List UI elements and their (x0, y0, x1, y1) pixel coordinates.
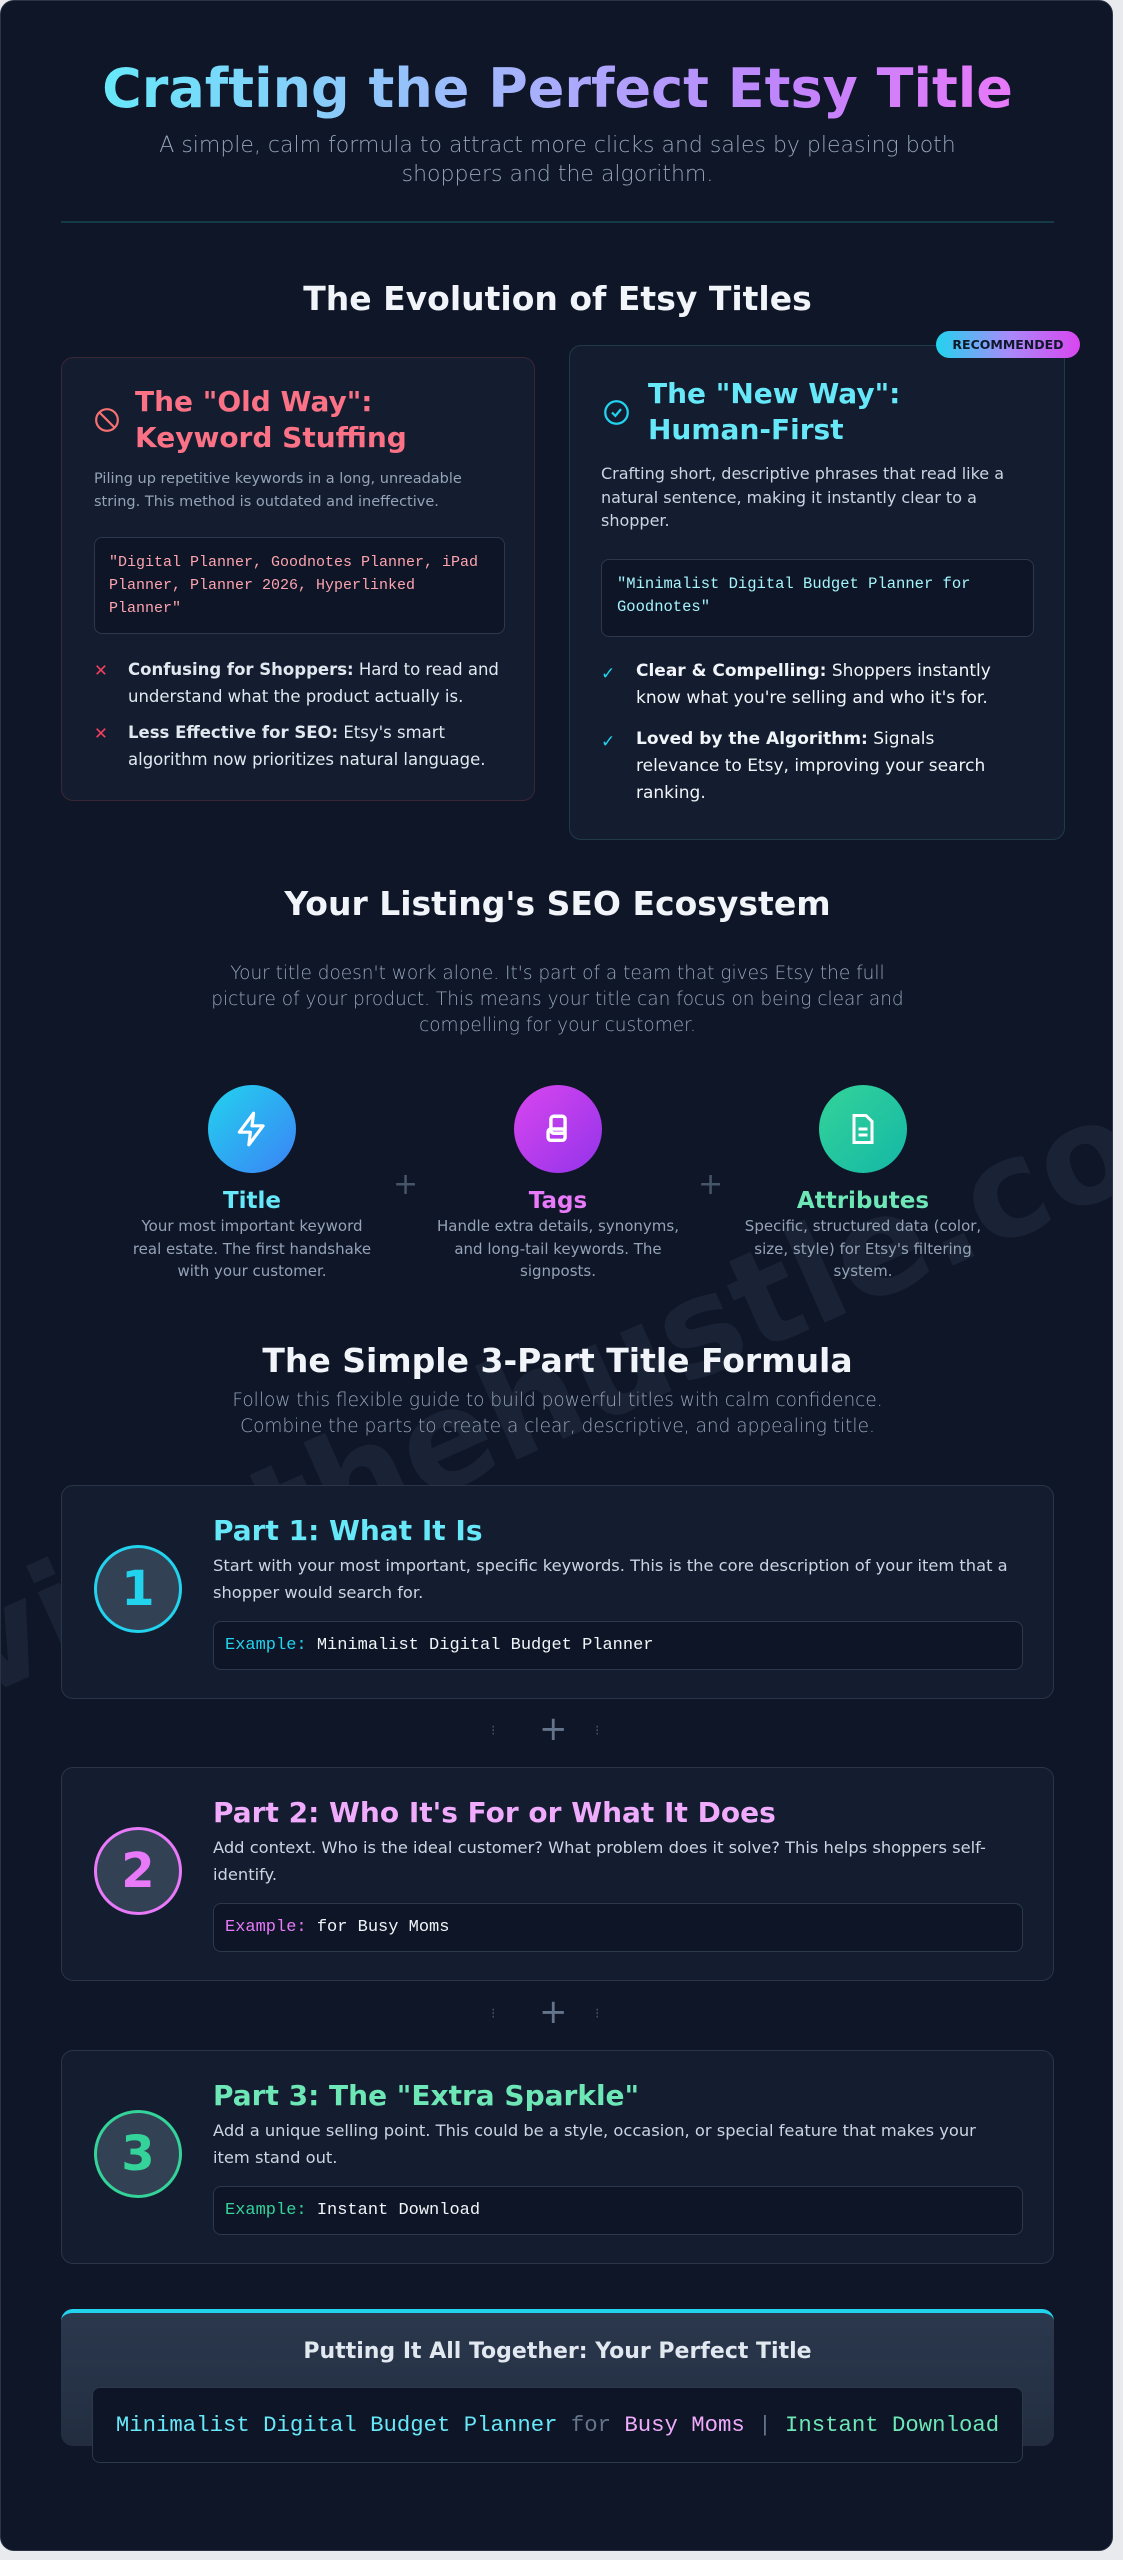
item: tags: Tags (529, 1188, 587, 1214)
icon: document (819, 1085, 907, 1173)
example: part 1: Example: Minimalist Digital Budget Planner (225, 1636, 653, 1655)
heading: formula: The Simple 3-Part Title Formula (262, 1341, 853, 1380)
text: part 3: Add a unique selling point. This could be a style, occasion, or special feature that makes your item stand out. (213, 2121, 976, 2167)
example: part 2 (213, 1903, 1023, 1952)
badge: 2: 2 (121, 1843, 155, 1899)
code: final title (92, 2387, 1023, 2463)
badge: 1: 1 (121, 1561, 155, 1617)
bullets: new pros: Clear & Compelling: Shoppers instantly know what you're selling and who it's for. (636, 661, 991, 708)
text: old description: Piling up repetitive keywords in a long, unreadable string. This method is outdated and ineffective. (94, 471, 462, 510)
bullets: new pros: ✓ (601, 664, 615, 684)
badge: recommended: RECOMMENDED (952, 337, 1064, 352)
heading: final: Putting It All Together: Your Perfect Title (303, 2339, 812, 2364)
example: part 3: Example: Instant Download (225, 2201, 480, 2220)
text: part 2: Add context. Who is the ideal customer? What problem does it solve? This helps shoppers self-identify. (213, 1838, 986, 1884)
code: new example (601, 559, 1034, 637)
item: attributes (745, 1085, 981, 1280)
item: attributes: Specific, structured data (color, size, style) for Etsy's filtering system. (745, 1217, 981, 1280)
badge: 3 (94, 2110, 182, 2198)
heading: evolution: The Evolution of Etsy Titles (303, 279, 812, 318)
badge: recommended (936, 331, 1080, 358)
connector: ⁝ (491, 1723, 495, 1739)
example: part 3 (213, 2186, 1023, 2235)
heading: new way (648, 377, 900, 446)
icon: check circle (604, 400, 629, 425)
code: old example (94, 537, 505, 634)
heading: part 3: Part 3: The "Extra Sparkle" (213, 2079, 639, 2112)
icon: tag (514, 1085, 602, 1173)
code: final title: Minimalist Digital Budget Planner for Busy Moms | Instant Download (116, 2412, 999, 2438)
bullets: new pros: Loved by the Algorithm: Signals relevance to Etsy, improving your search ranking. (636, 729, 985, 803)
title: Crafting the Perfect Etsy Title (102, 57, 1013, 120)
bullets: old cons: ✕ (94, 724, 108, 743)
connector: ⁝ (595, 2006, 599, 2022)
item: attributes: Attributes (797, 1188, 929, 1214)
icon: plus: + (698, 1167, 723, 1202)
heading: part 2: Part 2: Who It's For or What It Does (213, 1796, 776, 1829)
heading: old way: The "Old Way": (135, 385, 373, 418)
subtitle: A simple, calm formula to attract more clicks and sales by pleasing both shoppers and the algorithm. (159, 133, 956, 187)
text: formula intro: Follow this flexible guide to build powerful titles with calm confidence. Combine the parts to create a clear, descriptive, and appealing title. (232, 1390, 883, 1437)
connector: ⁝ (595, 1723, 599, 1739)
example: part 1 (213, 1621, 1023, 1670)
badge: 3: 3 (121, 2126, 155, 2182)
code: new example: "Minimalist Digital Budget Planner for Goodnotes" (617, 575, 970, 616)
heading: old way (135, 385, 407, 454)
text: seo intro: Your title doesn't work alone. It's part of a team that gives Etsy the full picture of your product. This means your title can focus on being clear and compelling for your customer. (211, 963, 904, 1036)
panel: final title (61, 2309, 1054, 2446)
connector: + (539, 1992, 568, 2032)
connector (491, 1992, 599, 2032)
heading: new way: Human-First (648, 413, 844, 446)
panel: part 3 (61, 2050, 1054, 2264)
item: title: Your most important keyword real estate. The first handshake with your customer. (133, 1217, 371, 1280)
icon: prohibited (95, 408, 119, 432)
icon: lightning (208, 1085, 296, 1173)
heading: old way: Keyword Stuffing (135, 421, 407, 454)
item: tags (437, 1085, 679, 1280)
bullets: new pros: ✓ (601, 732, 615, 752)
bullets: old cons: ✕ (94, 661, 108, 680)
heading: part 1: Part 1: What It Is (213, 1514, 483, 1547)
panel: part 1 (61, 1485, 1054, 1699)
panel: new way (569, 345, 1065, 840)
item: title (133, 1085, 371, 1280)
badge: 2 (94, 1827, 182, 1915)
example: part 2: Example: for Busy Moms (225, 1918, 449, 1937)
connector: ⁝ (491, 2006, 495, 2022)
panel: part 2 (61, 1767, 1054, 1981)
icon: plus: + (393, 1167, 418, 1202)
bullets: old cons: Less Effective for SEO: Etsy's smart algorithm now prioritizes natural language. (128, 723, 485, 769)
bullets: old cons: Confusing for Shoppers: Hard to read and understand what the product actually is. (128, 660, 499, 706)
bullets: new pros (601, 661, 991, 803)
text: part 1: Start with your most important, specific keywords. This is the core description of your item that a shopper would search for. (213, 1556, 1008, 1602)
item: tags: Handle extra details, synonyms, and long-tail keywords. The signposts. (437, 1217, 679, 1280)
code: old example: "Digital Planner, Goodnotes Planner, iPad Planner, Planner 2026, Hyperlinked Planner" (109, 554, 478, 617)
connector (491, 1709, 599, 1749)
connector: + (539, 1709, 568, 1749)
panel: old way (61, 357, 535, 801)
bullets: old cons (94, 660, 499, 769)
text: new description: Crafting short, descriptive phrases that read like a natural sentence, making it instantly clear to a shopper. (601, 464, 1004, 530)
badge: 1 (94, 1545, 182, 1633)
heading: new way: The "New Way": (648, 377, 900, 410)
item: title: Title (223, 1188, 281, 1214)
heading: seo ecosystem: Your Listing's SEO Ecosystem (284, 884, 831, 923)
